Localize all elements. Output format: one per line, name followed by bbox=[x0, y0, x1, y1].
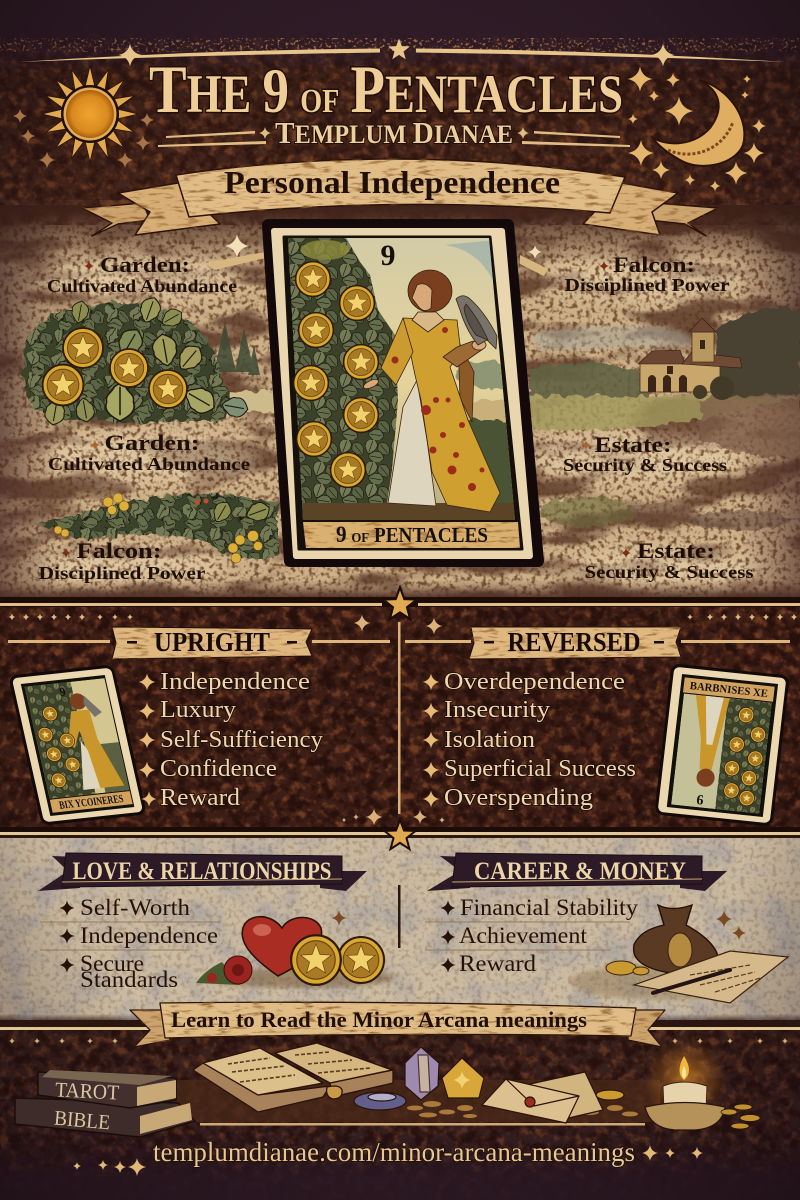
title: THE 9 OF PENTACLES bbox=[149, 51, 623, 127]
panel: career and money bbox=[425, 853, 788, 1003]
label: estate 2 bbox=[584, 538, 754, 582]
label: falcon 1: Falcon: bbox=[76, 538, 162, 563]
label: falcon 2 bbox=[564, 252, 730, 295]
divider: lower centre bbox=[398, 885, 400, 948]
list: career meanings: Reward bbox=[459, 951, 537, 976]
list: reversed meanings: Overspending bbox=[444, 785, 593, 811]
list: career meanings: Achievement bbox=[459, 923, 588, 948]
divider band above footer bbox=[0, 1020, 800, 1030]
label: garden 2: Cultivated Abundance bbox=[48, 454, 250, 474]
small reversed card bbox=[656, 665, 788, 825]
small reversed card: 6 bbox=[696, 792, 704, 809]
ribbon heading: love bbox=[38, 853, 367, 891]
list: upright meanings bbox=[138, 669, 323, 811]
list: love meanings: Secure bbox=[80, 951, 144, 976]
card number: 9 bbox=[380, 239, 396, 272]
illustration: flowering vines bbox=[35, 493, 278, 563]
ribbon heading: love: LOVE & RELATIONSHIPS bbox=[72, 858, 332, 885]
illustration: lower right foliage bbox=[540, 497, 790, 530]
small upright card bbox=[10, 666, 145, 824]
illustration: tarot and bible books bbox=[15, 1070, 195, 1137]
list: reversed meanings: Overdependence bbox=[444, 669, 625, 695]
small upright card: 9 bbox=[58, 685, 67, 699]
website url: templumdianae.com/minor-arcana-meanings bbox=[153, 1137, 635, 1167]
sparkles and ribbons beside card bbox=[205, 234, 548, 276]
label: estate 1 bbox=[563, 432, 727, 475]
card frame bbox=[268, 225, 538, 561]
heading: reversed: REVERSED bbox=[508, 627, 640, 657]
heading: reversed bbox=[405, 627, 790, 659]
heading: upright: UPRIGHT bbox=[154, 627, 270, 657]
list: love meanings: Self-Worth bbox=[80, 895, 191, 920]
panel: upright bbox=[8, 627, 390, 824]
illustration: open book bbox=[193, 1043, 393, 1112]
label: estate 2: Security & Success bbox=[584, 562, 754, 582]
subtitle: Templum Dianae bbox=[158, 115, 630, 150]
small reversed card: BARBNISES XE bbox=[689, 680, 768, 700]
list: career meanings: Financial Stability bbox=[460, 895, 639, 920]
dotted ornaments bbox=[8, 614, 798, 620]
label: garden 2 bbox=[48, 430, 250, 474]
banner: Personal Independence: Personal Independence bbox=[224, 164, 560, 200]
list: upright meanings: Self-Sufficiency bbox=[160, 727, 323, 753]
list: reversed meanings: Insecurity bbox=[444, 697, 550, 723]
list: upright meanings: Luxury bbox=[160, 697, 236, 723]
list: career meanings bbox=[425, 895, 639, 976]
card name plate: 9 OF PENTACLES bbox=[336, 522, 488, 547]
illustration: candle bbox=[644, 1038, 728, 1130]
list: reversed meanings: Superficial Success bbox=[444, 756, 636, 782]
list: upright meanings: Reward bbox=[160, 785, 240, 811]
list: love meanings: Standards bbox=[80, 967, 178, 992]
card illustration bbox=[285, 236, 525, 526]
label: garden 1 bbox=[47, 252, 237, 296]
list: reversed meanings bbox=[422, 669, 636, 811]
banner: Learn to Read: Learn to Read the Minor Arcana meanings bbox=[171, 1007, 587, 1032]
heading: upright bbox=[8, 627, 390, 659]
label: estate 1: Security & Success bbox=[563, 455, 727, 475]
label: garden 1: Garden: bbox=[100, 252, 190, 277]
illustration: garden with coins bbox=[22, 294, 275, 426]
label: estate 1: Estate: bbox=[594, 432, 672, 457]
illustration: crystals and stone bbox=[354, 1047, 484, 1110]
list: upright meanings: Confidence bbox=[160, 756, 277, 782]
icon: crescent moon with stars bbox=[628, 66, 766, 192]
card pentacles bbox=[294, 262, 378, 487]
illustration: tarot and bible books: BIBLE bbox=[53, 1106, 111, 1134]
label: falcon 1: Disciplined Power bbox=[38, 563, 206, 583]
meaning labels bbox=[38, 252, 754, 583]
central tarot card bbox=[268, 225, 538, 561]
divider with star bbox=[0, 820, 800, 849]
woman with falcon bbox=[362, 270, 500, 512]
subtitle: Templum Dianae: TEMPLUM DIANAE bbox=[275, 115, 513, 150]
ribbon heading: career: CAREER & MONEY bbox=[474, 858, 686, 885]
list: love meanings bbox=[40, 895, 220, 992]
illustration: estate landscape bbox=[530, 308, 800, 456]
ribbon heading: career bbox=[427, 853, 727, 891]
list: reversed meanings: Isolation bbox=[444, 727, 535, 753]
label: estate 2: Estate: bbox=[637, 538, 715, 563]
illustration: coin bag, letter and pen bbox=[570, 905, 788, 1003]
illustration: sealed envelope and letter bbox=[482, 1072, 624, 1123]
website url bbox=[73, 1137, 703, 1176]
icon: sun bbox=[13, 66, 154, 168]
banner: Personal Independence bbox=[82, 159, 718, 236]
footer dotted ornaments bbox=[9, 1038, 788, 1044]
list: love meanings: Independence bbox=[80, 923, 218, 948]
illustration: heart, rose and coins bbox=[196, 910, 395, 988]
small upright card: BIX YCOINERES bbox=[58, 793, 125, 812]
panel: reversed bbox=[405, 627, 790, 825]
header ornament rule bbox=[18, 39, 785, 66]
label: falcon 1 bbox=[38, 538, 206, 583]
divider with star bbox=[0, 587, 800, 619]
label: garden 1: Cultivated Abundance bbox=[47, 276, 237, 296]
label: falcon 2: Disciplined Power bbox=[564, 275, 730, 295]
label: garden 2: Garden: bbox=[104, 430, 200, 455]
panel: love and relationships bbox=[38, 853, 395, 992]
illustration: tarot and bible books: TAROT bbox=[55, 1077, 120, 1105]
coins on table bbox=[721, 1104, 760, 1129]
divider: centre vertical bbox=[342, 614, 445, 826]
banner: Learn to Read bbox=[130, 1002, 665, 1047]
list: upright meanings: Independence bbox=[160, 669, 310, 695]
label: falcon 2: Falcon: bbox=[613, 252, 695, 277]
table band bbox=[170, 1080, 660, 1126]
